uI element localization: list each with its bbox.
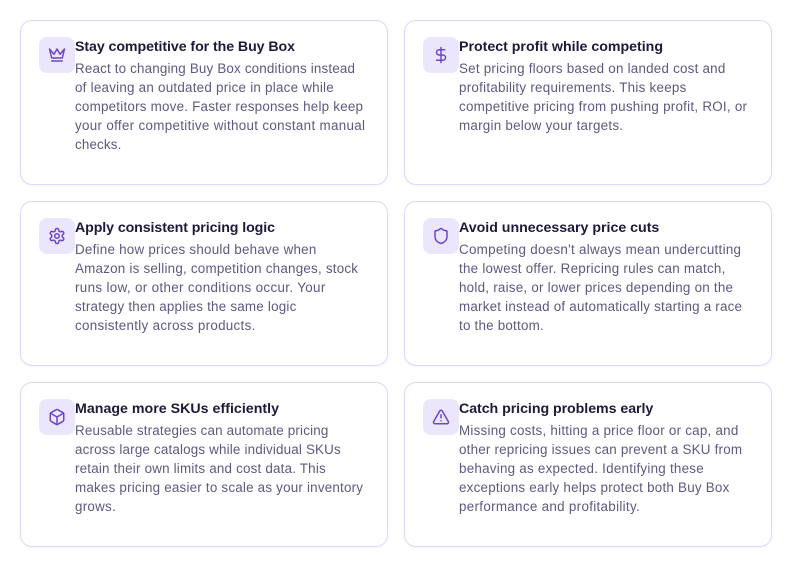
text block: heading and body [75,220,358,333]
text block: heading and body: Avoid unnecessary price cuts [459,220,659,236]
text block: heading and body [459,220,742,333]
panel: price cuts [404,201,772,366]
icon: dollar sign [423,37,459,73]
text block: heading and body: margin below your targets. [459,118,623,133]
text block: heading and body: hold, raise, or lower prices depending on the [459,280,733,295]
text block: heading and body: Competing doesn't always mean undercutting [459,242,741,257]
text block: heading and body: Set pricing floors based on landed cost and [459,61,725,76]
text block: heading and body: behaving as expected. Identifying these [459,461,704,476]
text block: heading and body: consistently across products. [75,318,255,333]
text block: heading and body: grows. [75,499,116,514]
icon: gear [39,218,75,254]
text block: heading and body: Protect profit while competing [459,39,663,55]
icon: shield [423,218,459,254]
icon: crown [39,37,75,73]
panel: SKUs [20,382,388,547]
text block: heading and body: Catch pricing problems early [459,401,653,417]
text block: heading and body: other repricing issues can prevent a SKU from [459,442,742,457]
text block: heading and body: competitors move. Faster responses help keep [75,99,363,114]
text block: heading and body: market instead of automatically starting a race [459,299,742,314]
text block: heading and body: profitability requirements. This keeps [459,80,687,95]
text block: heading and body: performance and profitability. [459,499,640,514]
text block: heading and body: your offer competitive without constant manual [75,118,365,133]
text block: heading and body: runs low, or other conditions occur. Your [75,280,326,295]
text block: heading and body: retain their own limits and cost data. This [75,461,326,476]
text block: heading and body [75,39,365,152]
text block: heading and body: Define how prices should behave when [75,242,316,257]
text block: heading and body: strategy then applies the same logic [75,299,297,314]
text block: heading and body: React to changing Buy Box conditions instead [75,61,355,76]
text block: heading and body: Reusable strategies can automate pricing [75,423,328,438]
text block: heading and body [75,401,363,514]
text block: heading and body: Manage more SKUs efficiently [75,401,279,417]
text block: heading and body: competitive pricing from pushing profit, ROI, or [459,99,748,114]
panel: profit [404,20,772,185]
text block: heading and body: makes pricing easier to scale as your inventory [75,480,363,495]
icon: warning triangle [423,399,459,435]
text block: heading and body: exceptions early helps protect both Buy Box [459,480,730,495]
panel: Buy Box [20,20,388,185]
panel: problems [404,382,772,547]
text block: heading and body: Stay competitive for the Buy Box [75,39,295,55]
text block: heading and body: Apply consistent pricing logic [75,220,275,236]
text block: heading and body: checks. [75,137,121,152]
text block: heading and body: of leaving an outdated price in place while [75,80,334,95]
text block: heading and body [459,401,742,514]
panel: logic [20,201,388,366]
text block: heading and body: the lowest offer. Repricing rules can match, [459,261,725,276]
text block: heading and body: Missing costs, hitting a price floor or cap, and [459,423,738,438]
text block: heading and body [459,39,748,133]
icon: box [39,399,75,435]
text block: heading and body: across large catalogs while individual SKUs [75,442,341,457]
text block: heading and body: to the bottom. [459,318,544,333]
text block: heading and body: Amazon is selling, competition changes, stock [75,261,358,276]
